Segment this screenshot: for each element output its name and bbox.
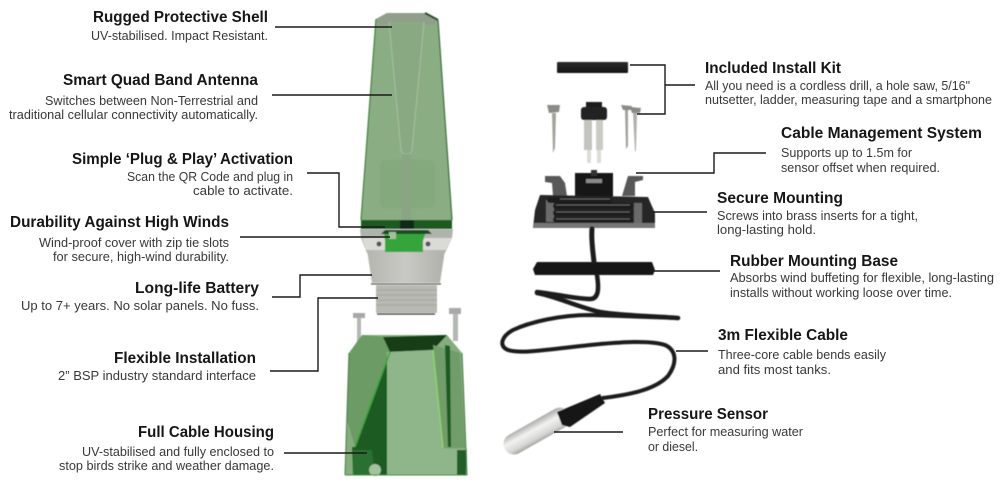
callout: Smart Quad Band Antenna: Switches between Non-Terrestrial and	[45, 94, 258, 108]
callout: Rugged Protective Shell	[91, 9, 268, 43]
arrow: install kit bracket leader	[630, 65, 695, 114]
leader lines	[240, 27, 766, 453]
arrow: housing leader	[284, 452, 367, 454]
illustration: plug connector	[581, 102, 607, 163]
arrow: secure mounting leader	[652, 211, 707, 213]
callout: Cable Management System: Supports up to 1.5m for	[781, 146, 912, 160]
callout: 3m Flexible Cable: 3m Flexible Cable	[718, 327, 848, 344]
callout: Durability Against High Winds: Wind-proof cover with zip tie slots	[39, 236, 229, 250]
callout: Smart Quad Band Antenna: Smart Quad Band Antenna	[63, 72, 258, 89]
illustration: rubber mounting base	[533, 262, 655, 275]
callout: Flexible Installation: 2” BSP industry standard interface	[58, 369, 256, 383]
arrow: activation leader	[307, 173, 385, 227]
callout: Pressure Sensor: or diesel.	[648, 440, 698, 454]
callout: 3m Flexible Cable: Three-core cable bends easily	[718, 348, 887, 362]
callout: Durability Against High Winds	[10, 214, 229, 264]
callout: Pressure Sensor	[648, 406, 803, 454]
callout: Flexible Installation	[58, 350, 256, 383]
callout: Simple Plug and Play Activation: Scan the QR Code and plug in	[127, 170, 293, 184]
callout: Cable Management System: sensor offset when required.	[781, 161, 940, 175]
arrow: shell leader	[275, 26, 392, 28]
callout: Simple Plug and Play Activation: Simple ‘Plug & Play’ Activation	[72, 151, 293, 168]
callout: Rubber Mounting Base	[730, 253, 994, 300]
callout: Secure Mounting: Screws into brass inserts for a tight,	[717, 209, 918, 223]
arrow: installation leader	[270, 298, 378, 371]
callout: Full Cable Housing: UV-stabilised and fully enclosed to	[82, 445, 274, 459]
illustration: antenna shell	[361, 13, 452, 229]
callout: Long-life Battery: Up to 7+ years. No solar panels. No fuss.	[21, 299, 259, 313]
callout: Simple Plug and Play Activation	[72, 151, 293, 198]
illustration: install screws	[547, 105, 641, 153]
illustration: install kit cap	[557, 62, 628, 73]
arrow: pressure sensor leader	[554, 431, 623, 433]
callout: 3m Flexible Cable: and fits most tanks.	[718, 363, 831, 377]
callout: Smart Quad Band Antenna	[9, 72, 258, 122]
callout: Rugged Protective Shell: UV-stabilised. Impact Resistant.	[91, 29, 268, 43]
callout: Included Install Kit: Included Install Kit	[705, 60, 841, 77]
callout: Included Install Kit	[705, 60, 992, 107]
callout: Full Cable Housing: Full Cable Housing	[138, 424, 274, 441]
illustration: cable housing	[345, 335, 467, 476]
callout: Secure Mounting: Secure Mounting	[717, 190, 843, 207]
callout: Cable Management System: Cable Management System	[781, 125, 982, 142]
illustration: housing bolts	[353, 308, 461, 342]
callout: Durability Against High Winds: Durability Against High Winds	[10, 214, 229, 231]
callout: Rubber Mounting Base: Rubber Mounting Base	[730, 253, 898, 270]
callout: Flexible Installation: Flexible Installation	[114, 350, 256, 367]
callout: Cable Management System	[781, 125, 982, 175]
callout: Smart Quad Band Antenna: traditional cellular connectivity automatically.	[9, 108, 258, 122]
arrow: rubber base leader	[650, 270, 720, 272]
callout: Long-life Battery: Long-life Battery	[135, 280, 259, 297]
callout: Secure Mounting	[717, 190, 918, 237]
arrow: battery leader	[272, 275, 372, 297]
illustration: flexible cable	[502, 229, 678, 398]
callout: Rubber Mounting Base: installs without working loose over time.	[730, 286, 952, 300]
callout: Included Install Kit: nutsetter, ladder, measuring tape and a smartphone	[705, 93, 992, 107]
callout: Pressure Sensor: Perfect for measuring water	[648, 425, 803, 439]
callout: Secure Mounting: long-lasting hold.	[717, 223, 816, 237]
arrow: cable management leader	[636, 153, 766, 173]
arrow: antenna leader	[272, 94, 392, 96]
callout: Full Cable Housing	[59, 424, 274, 473]
callout: 3m Flexible Cable	[718, 327, 887, 377]
callout: Full Cable Housing: stop birds strike and weather damage.	[59, 459, 274, 473]
callout: Simple Plug and Play Activation: cable to activate.	[193, 184, 293, 198]
callout: Durability Against High Winds: for secure, high-wind durability.	[53, 250, 229, 264]
illustration: wind-proof collar and battery	[360, 229, 453, 314]
illustration: cable management bracket	[533, 170, 655, 228]
callout: Included Install Kit: All you need is a cordless drill, a hole saw, 5/16"	[705, 79, 970, 93]
arrow: flexible cable leader	[676, 350, 708, 352]
callout: Pressure Sensor: Pressure Sensor	[648, 406, 768, 423]
callout: Rubber Mounting Base: Absorbs wind buffeting for flexible, long-lasting	[730, 271, 994, 285]
callout: Rugged Protective Shell: Rugged Protective Shell	[93, 9, 268, 26]
arrow: durability leader	[240, 236, 390, 238]
illustration: pressure sensor	[514, 394, 605, 444]
callout: Long-life Battery	[21, 280, 259, 313]
